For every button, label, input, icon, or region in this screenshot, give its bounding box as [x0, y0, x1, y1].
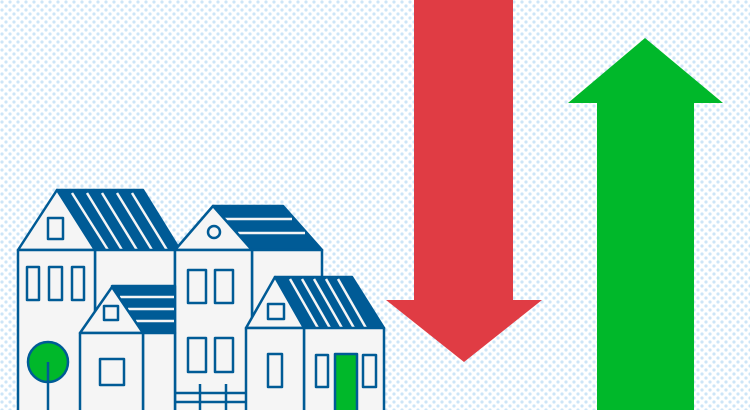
- icon: green door: [335, 354, 357, 410]
- house: right: [246, 277, 384, 410]
- house: left tall: [18, 190, 180, 410]
- arrow: green up: [568, 38, 723, 410]
- house: small middle: [80, 286, 175, 410]
- icon: tree: [28, 342, 68, 410]
- arrow: red down: [386, 0, 542, 362]
- houses illustration: [18, 190, 384, 410]
- house: center tall: [175, 206, 322, 410]
